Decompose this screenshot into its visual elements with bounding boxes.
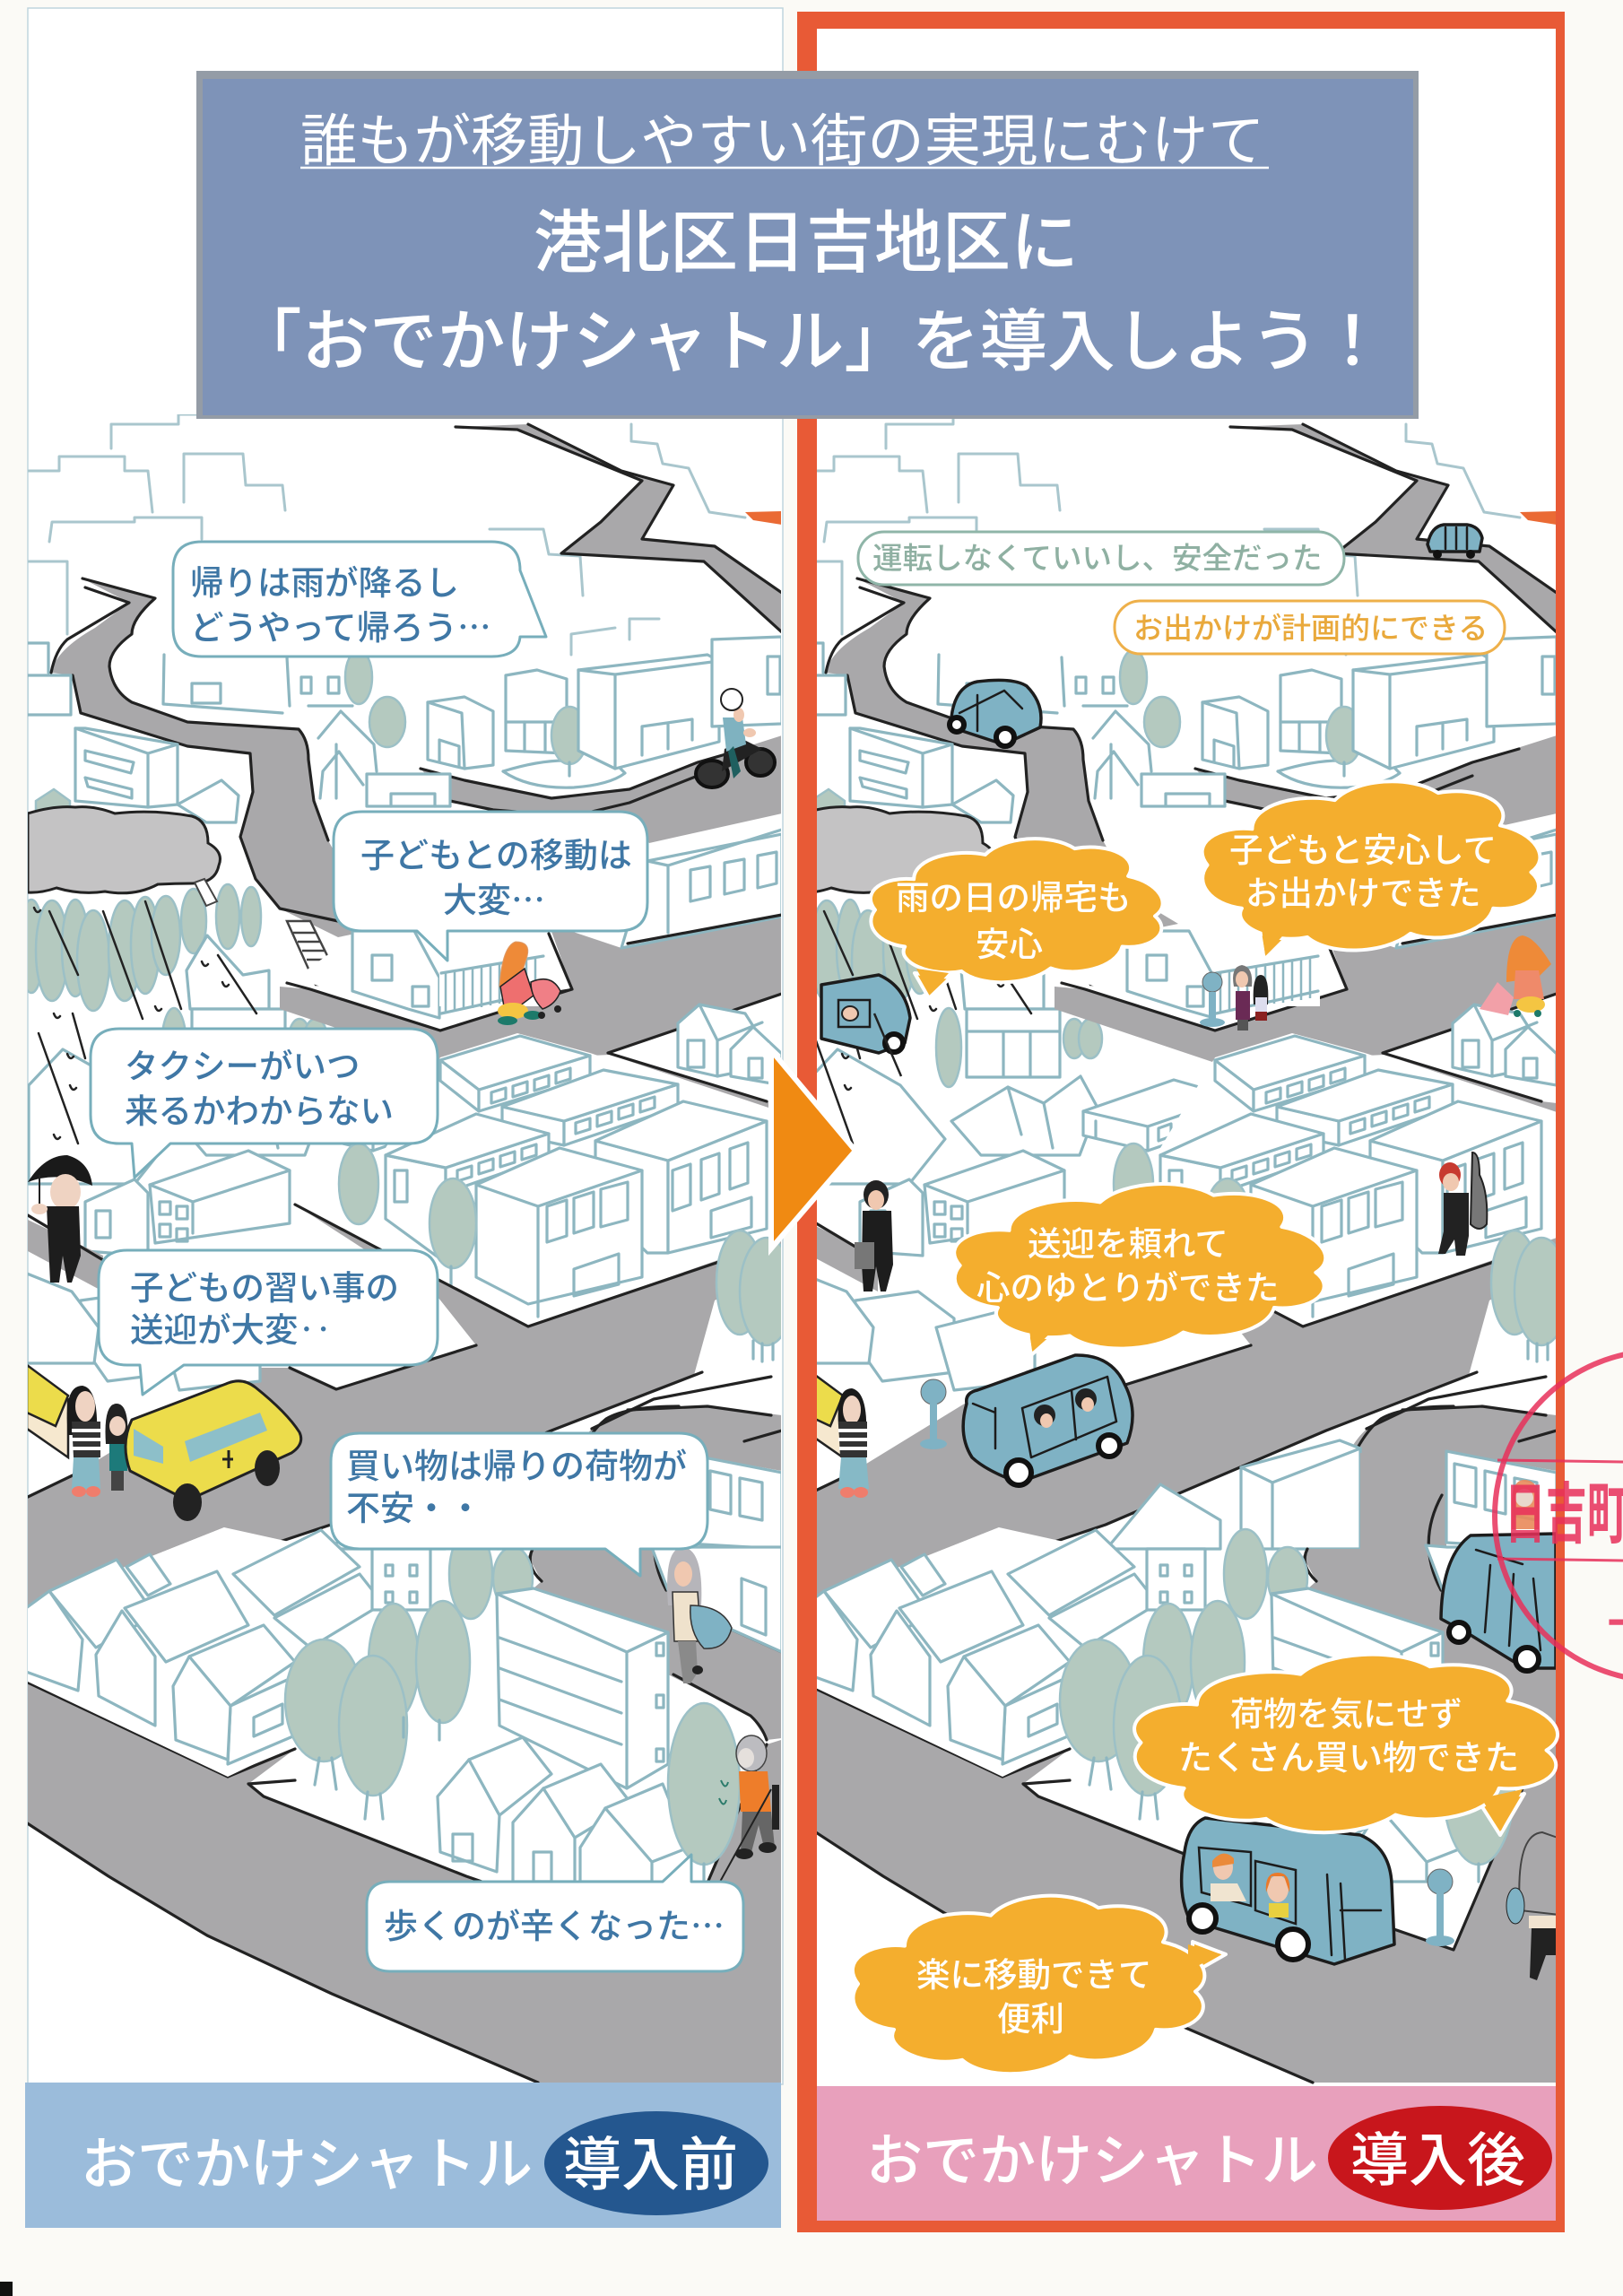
callout: 子どもとの移動は: 大変… bbox=[443, 873, 545, 922]
cloud callout: 雨の日の帰宅も: 雨の日の帰宅も bbox=[896, 870, 1132, 919]
cloud callout: 荷物を気にせず bbox=[1134, 1655, 1558, 1835]
cloud callout: 子どもと安心して: 子どもと安心して bbox=[1229, 822, 1497, 872]
callout: 歩くのが: 歩くのが辛くなった… bbox=[384, 1899, 725, 1948]
bike rider bbox=[696, 689, 775, 787]
centre bus bbox=[963, 1355, 1133, 1485]
cloud callout: 子どもと安心して: お出かけできた bbox=[1245, 865, 1481, 915]
red stamp bbox=[1495, 1351, 1623, 1681]
bottom band: 導入後: 導入後 bbox=[1350, 2113, 1525, 2197]
bottom bus bbox=[1182, 1818, 1394, 1964]
umbrella man bbox=[28, 1155, 92, 1283]
callout: 買い物は bbox=[331, 1433, 707, 1576]
title line 1: 誰もが移動しやすい街の実現にむけて bbox=[300, 96, 1264, 178]
arrow: before to after bbox=[771, 1050, 855, 1248]
woman with shopping bag bbox=[667, 1547, 732, 1683]
bottom band: 導入前: 導入前 bbox=[563, 2118, 738, 2202]
elderly man with cane bbox=[719, 1735, 777, 1882]
callout: 買い物は: 買い物は帰りの荷物が bbox=[346, 1439, 687, 1488]
cloud callout: 送迎を頼れて bbox=[954, 1184, 1325, 1355]
city illustration after bbox=[794, 414, 1568, 2083]
city illustration before bbox=[19, 414, 794, 2083]
pill: green 運転しなくて: 運転しなくていいし、安全だった bbox=[872, 534, 1322, 578]
cloud callout: 荷物を気にせず: たくさん買い物できた bbox=[1178, 1730, 1519, 1779]
man with guitar case bbox=[1438, 1152, 1487, 1256]
title line 2: 港北区日吉地区に bbox=[534, 187, 1079, 286]
right shuttle under stamp bbox=[1441, 1480, 1556, 1671]
bottom band: 導入後: おでかけシャトル bbox=[866, 2116, 1318, 2197]
yellow taxi bbox=[126, 1381, 301, 1521]
callout: 帰りは雨が bbox=[173, 542, 546, 657]
callout: 帰りは雨が: 帰りは雨が降るし bbox=[190, 555, 459, 604]
bottom band: 導入前: おでかけシャトル bbox=[81, 2119, 533, 2201]
scan marks bbox=[0, 2282, 13, 2296]
callout: 歩くのが bbox=[367, 1855, 743, 1971]
callout: タクシーがいつ: 来るかわからない bbox=[125, 1083, 394, 1133]
pill: orange お出かけが: お出かけが計画的にできる bbox=[1133, 604, 1488, 648]
red frame bbox=[797, 12, 1565, 2232]
bus stop centre bbox=[920, 1379, 947, 1449]
shuttle on winding road bbox=[950, 680, 1041, 746]
man bottom right bbox=[1506, 1832, 1560, 1980]
cloud callout: 雨の日の帰宅も: 安心 bbox=[976, 917, 1043, 966]
cloud callout: 送迎を頼れて: 心のゆとりができた bbox=[976, 1260, 1279, 1309]
bus stop and pair bbox=[1200, 965, 1268, 1031]
businessman bbox=[855, 1180, 893, 1292]
callout: 子どもとの移動は bbox=[334, 812, 647, 961]
girl with stroller bbox=[498, 942, 571, 1025]
mother and child bbox=[67, 1386, 127, 1497]
bottom band: 導入後 bbox=[817, 2086, 1556, 2221]
cloud callout: 荷物を気にせず: 荷物を気にせず bbox=[1230, 1687, 1462, 1735]
cloud callout: 楽に移動できて bbox=[853, 1896, 1226, 2074]
bus stop bottom bbox=[1426, 1869, 1454, 1946]
callout: 買い物は: 不安・・ bbox=[346, 1481, 482, 1530]
title line 3: 「おでかけシャトル」を導入しよう！ bbox=[234, 286, 1386, 385]
title banner bbox=[196, 71, 1419, 419]
cloud callout: 楽に移動できて: 便利 bbox=[997, 1991, 1064, 2040]
girl with stroller, right bbox=[1480, 935, 1551, 1017]
cloud callout: 楽に移動できて: 楽に移動できて bbox=[916, 1947, 1151, 1996]
woman right bbox=[838, 1388, 869, 1498]
panel: after (導入後) bbox=[794, 12, 1568, 2232]
callout: 子どもとの移動は: 子どもとの移動は bbox=[360, 828, 632, 877]
callout: タクシーがいつ: タクシーがいつ bbox=[125, 1039, 360, 1088]
callout: 子どもの習い事: 子どもの習い事の bbox=[130, 1260, 399, 1309]
callout: タクシーがいつ bbox=[91, 1029, 438, 1178]
cloud callout: 子どもと安心して bbox=[1202, 781, 1540, 960]
callout: 子どもの習い事: 送迎が大変‥ bbox=[130, 1302, 332, 1352]
callout: 帰りは雨が: どうやって帰ろう… bbox=[190, 600, 491, 649]
panel: before (導入前) bbox=[19, 8, 794, 2228]
mini shuttle top bbox=[1428, 525, 1482, 559]
callout: 子どもの習い事 bbox=[99, 1250, 438, 1395]
cloud callout: 雨の日の帰宅も bbox=[871, 839, 1163, 998]
bottom band: 導入前 bbox=[25, 2083, 781, 2228]
shuttle in rain bbox=[821, 975, 910, 1076]
cloud callout: 送迎を頼れて: 送迎を頼れて bbox=[1028, 1216, 1228, 1265]
